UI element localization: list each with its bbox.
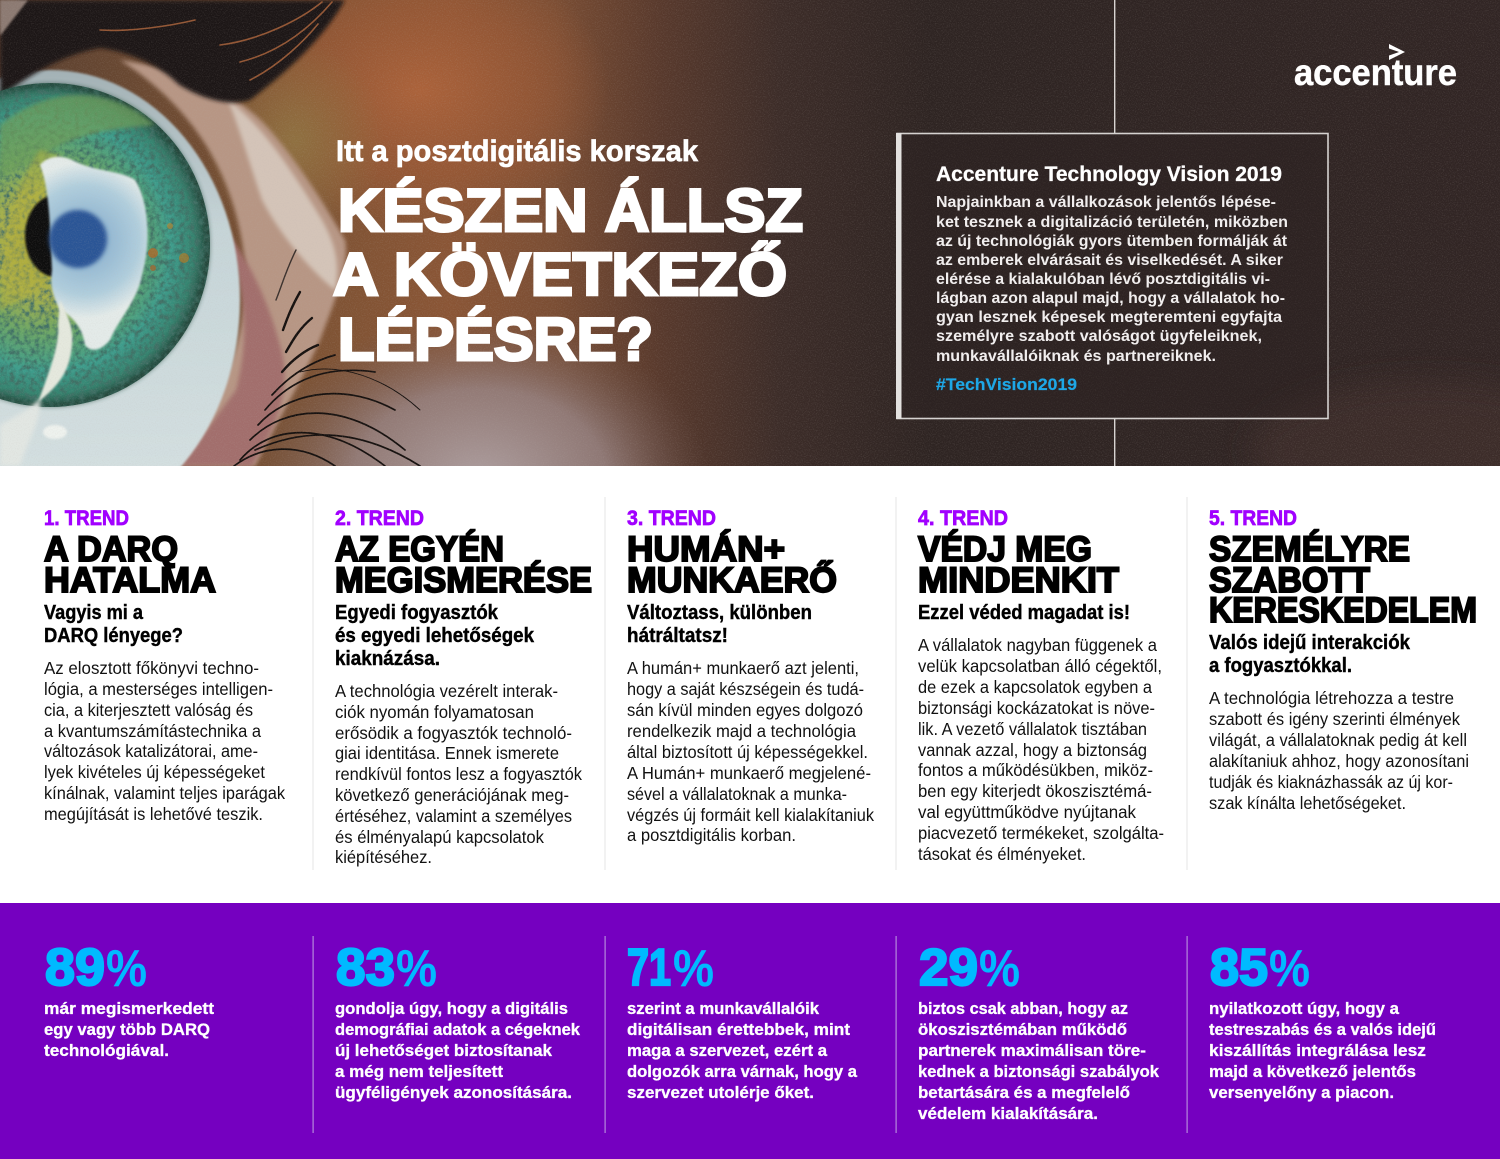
film grain	[0, 0, 1500, 466]
stat description	[918, 999, 1160, 1123]
stat description: gondolja úgy, hogy a digitális	[335, 999, 568, 1018]
trend subtitle: hátráltatsz!	[627, 625, 728, 647]
trend body text: Az elosztott főkönyvi techno-	[44, 658, 259, 678]
hero photo: close-up of an eye	[0, 0, 1500, 466]
stat description: ügyféligények azonosítására.	[335, 1083, 572, 1102]
eyelid skin	[120, 60, 346, 466]
trend body text: biztonsági kockázatokat is növe-	[918, 698, 1155, 718]
trend title: MEGISMERÉSE	[335, 560, 592, 600]
percentage	[627, 939, 714, 998]
kicker: Itt a posztdigitális korszak	[336, 135, 698, 168]
trend body text: változások katalizátorai, ame-	[44, 741, 258, 761]
trend body text: A vállalatok nagyban függenek a	[918, 635, 1157, 655]
percentage	[1210, 939, 1310, 998]
trend title: KERESKEDELEM	[1209, 591, 1477, 630]
stat description: dolgozók arra várnak, hogy a	[627, 1062, 858, 1081]
hashtag: #TechVision2019	[936, 375, 1077, 394]
box body: az emberek elvárásait és viselkedését. A siker	[936, 252, 1283, 269]
percentage	[45, 939, 147, 998]
trend title: VÉDJ MEG	[918, 529, 1092, 569]
stat description: maga a szervezet, ezért a	[627, 1041, 828, 1060]
main headline: LÉPÉSRE?	[338, 306, 653, 373]
stat description	[627, 999, 858, 1102]
percentage: 71	[627, 939, 671, 997]
trend title: HATALMA	[44, 561, 216, 600]
trend title: SZEMÉLYRE	[1209, 529, 1410, 569]
percentage: %	[979, 940, 1020, 998]
trend subtitle: Egyedi fogyasztók	[335, 602, 499, 624]
trend body text: tudják és kiaknázhassák az új kor-	[1209, 772, 1453, 792]
trend body text: rendelkezik majd a technológia	[627, 721, 856, 741]
box frame	[896, 133, 1328, 419]
trend subtitle: Változtass, különben	[627, 602, 812, 624]
percentage: 83	[336, 939, 395, 997]
trend body text: rendkívül fontos lesz a fogyasztók	[335, 764, 582, 784]
trend title	[627, 529, 837, 600]
trend label: 2. TREND	[335, 507, 424, 530]
stat description: partnerek maximálisan töre-	[918, 1041, 1146, 1060]
trend subtitle: Vagyis mi a	[44, 602, 144, 624]
stat description: nyilatkozott úgy, hogy a	[1209, 999, 1400, 1018]
percentage: 29	[919, 939, 978, 997]
trend label: 4. TREND	[918, 507, 1008, 530]
box body: Napjainkban a vállalkozások jelentős lépése-	[936, 194, 1276, 211]
stat 1	[44, 939, 214, 1060]
trend body text: a posztdigitális korban.	[627, 825, 796, 845]
trend body text: ben egy kiterjedt ökoszisztémá-	[918, 781, 1152, 801]
trend body text: alakítaniuk ahhoz, hogy azonosítani	[1209, 751, 1469, 771]
percentage: 85	[1210, 939, 1268, 997]
stat description: kednek a biztonsági szabályok	[918, 1062, 1160, 1081]
trend body text: lógia, a mesterséges intelligen-	[44, 679, 273, 699]
panel: statistics band	[0, 903, 1500, 1159]
stat description: digitálisan érettebbek, mint	[627, 1020, 850, 1039]
percentage: %	[396, 940, 437, 998]
stat description: technológiával.	[44, 1041, 169, 1060]
stat description: a még nem teljesített	[335, 1062, 503, 1081]
stat description: védelem kialakítására.	[918, 1104, 1098, 1123]
stat 5	[1209, 939, 1436, 1102]
trend body text	[335, 681, 582, 867]
trend body text: kiépítéséhez.	[335, 847, 432, 867]
stat 3	[627, 939, 858, 1102]
stat description: versenyelőny a piacon.	[1209, 1083, 1394, 1102]
panel: trend 4	[918, 507, 1164, 864]
trend subtitle: Valós idejű interakciók	[1209, 632, 1411, 654]
trend title	[335, 529, 592, 600]
trend title: AZ EGYÉN	[335, 529, 504, 569]
trend subtitle	[44, 602, 183, 647]
pupil	[24, 196, 54, 278]
stat description: demográfiai adatok a cégeknek	[335, 1020, 581, 1039]
trend title: MUNKAERŐ	[627, 560, 837, 600]
stat description	[44, 999, 214, 1060]
trend body text: tásokat és élményeket.	[918, 844, 1086, 864]
stat description: már megismerkedett	[44, 999, 214, 1018]
band background	[0, 903, 1500, 1159]
stat description: kiszállítás integrálása lesz	[1209, 1041, 1426, 1060]
window reflection	[40, 157, 148, 350]
accenture logo: accenture	[1294, 52, 1457, 93]
trend body text: piacvezető termékeket, szolgálta-	[918, 823, 1164, 843]
trend body text: világát, a vállalatoknak pedig át kell	[1209, 730, 1467, 750]
iris	[0, 83, 210, 407]
trend body text: és élményalapú kapcsolatok	[335, 827, 544, 847]
trend body text: val együttműködve nyújtanak	[918, 802, 1136, 822]
trend body text: szabott és igény szerinti élmények	[1209, 709, 1460, 729]
trend body text: kínálnak, valamint teljes iparágak	[44, 783, 285, 803]
main headline: A KÖVETKEZŐ	[333, 241, 787, 308]
trend body text: giai identitása. Ennek ismerete	[335, 743, 559, 763]
trend body text: által biztosított új képességekkel.	[627, 742, 868, 762]
box body: lágban azon alapul majd, hogy a vállalatok ho-	[936, 290, 1285, 307]
trend body text: de ezek a kapcsolatok egyben a	[918, 677, 1152, 697]
box heading: Accenture Technology Vision 2019	[936, 163, 1282, 186]
trend label: 5. TREND	[1209, 507, 1297, 530]
trend body text: A technológia vezérelt interak-	[335, 681, 558, 701]
trend body text: cia, a kiterjesztett valóság és	[44, 700, 253, 720]
trend subtitle	[335, 602, 535, 670]
trend body text: értéséhez, valamint a személyes	[335, 806, 572, 826]
trend subtitle	[1209, 632, 1411, 677]
stat description: szervezet utolérje őket.	[627, 1083, 814, 1102]
percentage: %	[673, 940, 714, 998]
stat description: biztos csak abban, hogy az	[918, 999, 1128, 1018]
stat description: új lehetőséget biztosítanak	[335, 1041, 553, 1060]
hero panel	[0, 0, 1500, 466]
trend body text: fontos a működésükben, miköz-	[918, 760, 1153, 780]
trend title	[918, 529, 1119, 600]
stat description: testreszabás és a valós idejű	[1209, 1020, 1436, 1039]
stat description: szerint a munkavállalóik	[627, 999, 820, 1018]
trend body text	[1209, 688, 1469, 813]
trend body text: megújítását is lehetővé teszik.	[44, 804, 263, 824]
trend body text: szak kínálta lehetőségeket.	[1209, 793, 1406, 813]
trend title	[44, 530, 216, 600]
stat description: ökoszisztémában működő	[918, 1020, 1127, 1039]
stat description: betartására és a megfelelő	[918, 1083, 1130, 1102]
trend body text: végzés új formáit kell kialakítaniuk	[627, 805, 874, 825]
panel: trend 5	[1209, 507, 1477, 813]
panel: trend 1	[44, 507, 285, 824]
trend body text	[627, 658, 874, 845]
trend body text	[918, 635, 1164, 864]
trend title: SZABOTT	[1209, 561, 1370, 600]
panel: trend 3	[627, 507, 874, 845]
trend subtitle: a fogyasztókkal.	[1209, 655, 1352, 677]
box body: ket tesznek a digitalizáció területén, miközben	[936, 214, 1288, 231]
trend title	[1209, 529, 1477, 630]
stat 4	[918, 939, 1160, 1123]
trend subtitle: Ezzel véded magadat is!	[918, 602, 1130, 624]
stat description	[1209, 999, 1436, 1102]
percentage	[919, 939, 1020, 998]
trend body text: lyek kivételes új képességeket	[44, 762, 265, 782]
box body: gyan lesznek képesek megteremteni egyfajta	[936, 309, 1282, 326]
trend body text: ciók nyomán folyamatosan	[335, 702, 534, 722]
trend subtitle: kiaknázása.	[335, 648, 440, 670]
stat description: majd a következő jelentős	[1209, 1062, 1416, 1081]
trend title: HUMÁN+	[627, 529, 785, 569]
main headline: KÉSZEN ÁLLSZ	[338, 177, 803, 244]
trend label: 3. TREND	[627, 507, 716, 530]
trend body text: következő generációjának meg-	[335, 785, 569, 805]
box body: elérése a kialakulóban lévő posztdigitális vi-	[936, 271, 1270, 288]
box body: személyre szabott valóságot ügyfeleiknek,	[936, 328, 1262, 345]
divider line below box	[1114, 418, 1115, 466]
top-left corner skin	[0, 0, 28, 36]
trend body text: sével a vállalatoknak a munka-	[627, 784, 847, 804]
trend body text: velük kapcsolatban álló cégektől,	[918, 656, 1162, 676]
trend body text: A technológia létrehozza a testre	[1209, 688, 1454, 708]
trend subtitle: és egyedi lehetőségek	[335, 625, 535, 647]
trend title: MINDENKIT	[918, 561, 1119, 600]
box body: munkavállalóiknak és partnereiknek.	[936, 348, 1216, 365]
trend body text: sán kívül minden egyes dolgozó	[627, 700, 863, 720]
panel: trend 2	[335, 507, 592, 867]
stat 2	[335, 939, 581, 1102]
divider line above box	[1114, 0, 1115, 133]
trend subtitle: DARQ lényege?	[44, 625, 183, 647]
box body: az új technológiák gyors ütemben formálják át	[936, 233, 1288, 250]
trend subtitle	[627, 602, 812, 647]
lower lashes	[234, 250, 420, 466]
percentage: %	[1269, 940, 1310, 998]
stat dividers	[312, 936, 1188, 1133]
trend body text: lik. A vezető vállalatok tisztában	[918, 719, 1147, 739]
percentage	[336, 939, 437, 998]
percentage: 89	[45, 939, 105, 997]
dark upper lash mass	[0, 0, 345, 102]
trend body text: hogy a saját készségein és tudá-	[627, 679, 864, 699]
trend body text: vannak azzal, hogy a biztonság	[918, 740, 1147, 760]
trend body text	[44, 658, 285, 824]
intro box	[896, 133, 1328, 419]
trend body text: A Humán+ munkaerő megjelené-	[627, 763, 871, 783]
trend section dividers	[312, 497, 1188, 870]
trend body text: a kvantumszámítástechnika a	[44, 721, 261, 741]
stat description: egy vagy több DARQ	[44, 1020, 210, 1039]
trend body text: A humán+ munkaerő azt jelenti,	[627, 658, 859, 678]
trend label: 1. TREND	[44, 507, 129, 530]
trend title: A DARQ	[44, 530, 178, 569]
trend body text: erősödik a fogyasztók technoló-	[335, 723, 572, 743]
percentage: %	[106, 940, 147, 998]
box body	[936, 194, 1288, 365]
iris flecks	[148, 248, 158, 258]
upper lash highlights	[100, 2, 332, 80]
main headline	[333, 177, 803, 373]
sclera	[0, 68, 242, 466]
stat description	[335, 999, 581, 1102]
